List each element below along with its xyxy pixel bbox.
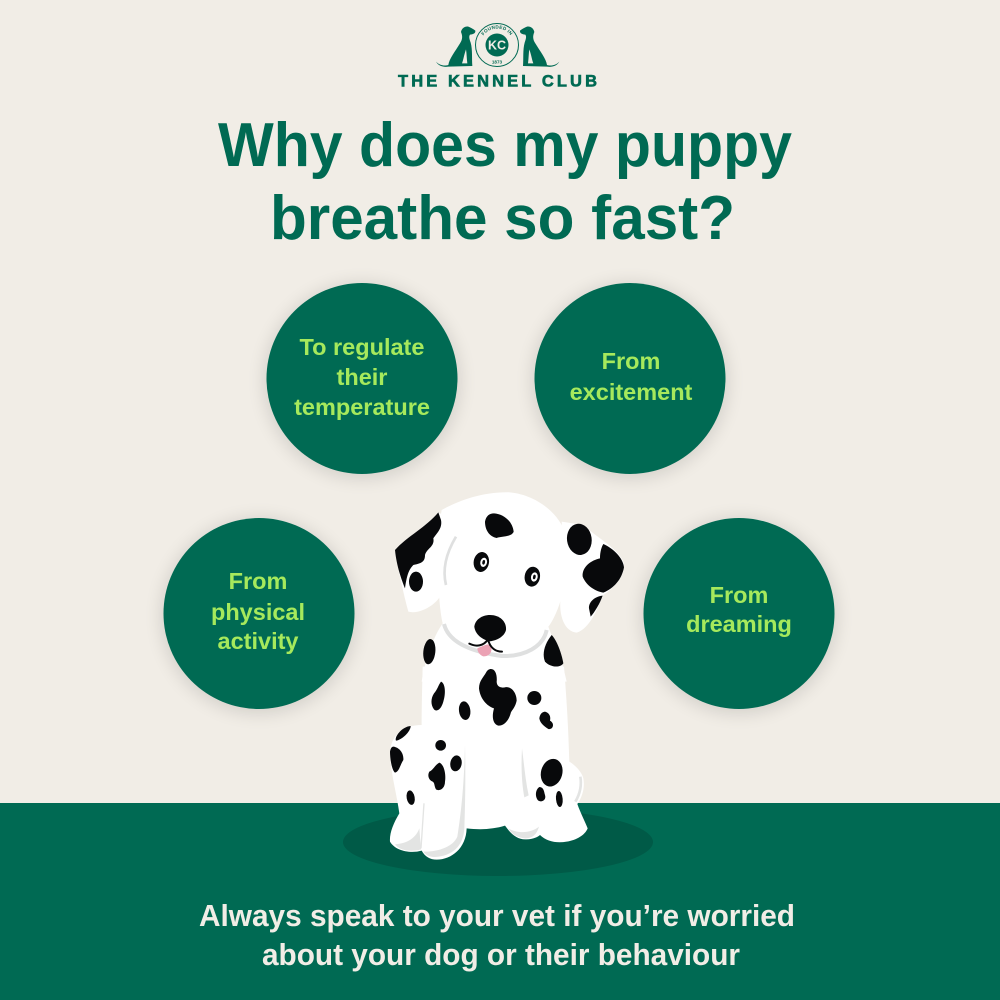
reason circle: temperature bbox=[265, 283, 459, 478]
icon: founded seal: 1873 bbox=[492, 60, 503, 64]
reason circle: temperature: To regulate bbox=[300, 334, 424, 360]
reason circle: temperature: their bbox=[337, 364, 387, 390]
eyes bbox=[472, 551, 542, 588]
nose and mouth bbox=[469, 615, 506, 652]
green ground band bbox=[0, 803, 1000, 1000]
title: Why does my puppy bbox=[218, 111, 792, 180]
icon: founded seal: FOUNDED IN bbox=[481, 25, 512, 36]
logo wordmark: THE KENNEL CLUB bbox=[398, 72, 597, 90]
reason circle: dreaming: From bbox=[710, 582, 768, 608]
reason circle: physical activity: activity bbox=[218, 628, 298, 654]
tongue bbox=[477, 645, 492, 656]
icon: right seated dog bbox=[520, 27, 559, 67]
right ear bbox=[560, 522, 624, 633]
title bbox=[218, 111, 792, 253]
logo: The Kennel Club bbox=[398, 23, 597, 90]
puppy body and legs bbox=[390, 667, 588, 860]
icon: left seated dog bbox=[436, 27, 475, 67]
footer advice text: about your dog or their behaviour bbox=[262, 937, 740, 972]
left ear bbox=[395, 512, 457, 612]
reason circle: dreaming bbox=[642, 518, 836, 713]
reason circle: excitement bbox=[533, 283, 727, 478]
reason circle: temperature: temperature bbox=[294, 394, 430, 420]
footer advice text bbox=[199, 898, 795, 972]
reason circle: dreaming: dreaming bbox=[686, 611, 792, 637]
forehead spot bbox=[485, 513, 514, 538]
body spots bbox=[390, 669, 566, 807]
puppy head bbox=[395, 492, 624, 682]
footer advice text: Always speak to your vet if you’re worried bbox=[199, 898, 795, 933]
puppy ground shadow bbox=[343, 808, 653, 876]
reason circle: excitement: From bbox=[602, 348, 660, 374]
title: breathe so fast? bbox=[270, 184, 735, 253]
neck spots bbox=[422, 638, 437, 665]
reason circle: physical activity: From bbox=[229, 568, 287, 594]
reason circle: physical activity: physical bbox=[211, 599, 305, 625]
reason circle: physical activity bbox=[162, 518, 356, 713]
icon: founded seal bbox=[475, 23, 519, 67]
icon: founded seal: KC bbox=[488, 38, 506, 52]
reason circle: excitement: excitement bbox=[570, 379, 693, 405]
illustration: dalmatian puppy bbox=[390, 492, 624, 860]
collar bbox=[444, 624, 547, 656]
